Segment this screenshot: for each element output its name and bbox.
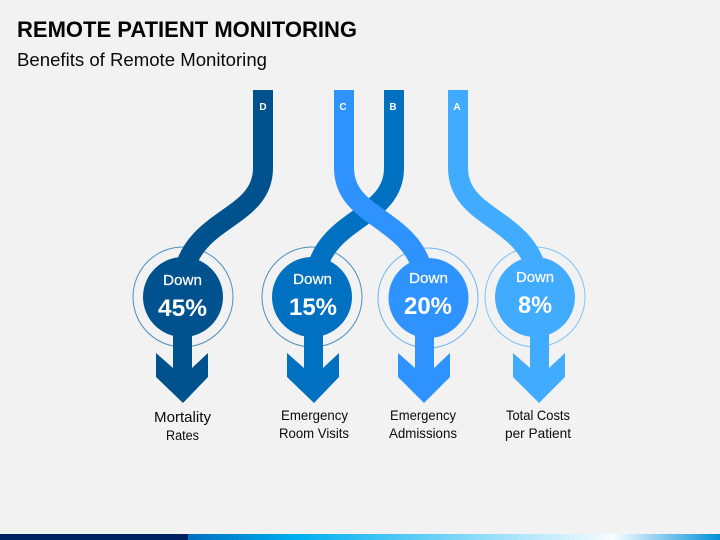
label A: per Patient <box>505 425 571 441</box>
circle B <box>272 257 352 337</box>
arrow A <box>513 330 565 403</box>
ribbon D <box>184 90 263 272</box>
value B <box>289 271 337 321</box>
ring A <box>485 247 585 347</box>
circle A <box>495 257 575 337</box>
label C: Emergency <box>390 407 456 423</box>
value C: 20% <box>404 293 452 320</box>
ring C <box>378 248 478 348</box>
value C: Down <box>409 270 448 287</box>
value A <box>516 269 554 319</box>
ribbon A <box>458 90 537 272</box>
label A: Total Costs <box>506 407 570 423</box>
ring B <box>262 247 362 347</box>
circle C <box>388 258 468 338</box>
letter D: D <box>259 102 267 113</box>
letter B: B <box>389 102 397 113</box>
label D: Mortality <box>154 410 212 426</box>
value B: Down <box>293 271 332 288</box>
label B: Emergency <box>281 407 348 423</box>
ribbon B <box>316 90 394 272</box>
value D: 45% <box>158 295 207 322</box>
column D: mortality rates <box>133 90 267 443</box>
label D <box>154 410 212 443</box>
subtitle: Benefits of Remote Monitoring <box>17 49 267 70</box>
arrow C <box>398 330 450 403</box>
circle D <box>143 257 223 337</box>
label C: Admissions <box>389 425 457 441</box>
ring D <box>133 247 233 347</box>
label B <box>279 407 349 441</box>
label D: Rates <box>166 428 199 443</box>
value A: 8% <box>518 292 552 319</box>
value A: Down <box>516 269 554 286</box>
column B: emergency room visits <box>262 90 397 441</box>
letter C: C <box>339 102 347 113</box>
label B: Room Visits <box>279 425 349 441</box>
arrow B <box>287 330 339 403</box>
column C: emergency admissions <box>339 90 478 441</box>
value D: Down <box>163 272 202 289</box>
value D <box>158 272 207 322</box>
label A <box>505 407 571 441</box>
value B: 15% <box>289 294 337 321</box>
ribbon C <box>344 90 423 272</box>
value C <box>404 270 452 320</box>
title: REMOTE PATIENT MONITORING <box>17 17 357 42</box>
letter A: A <box>453 102 461 113</box>
label C <box>389 407 457 441</box>
arrow D <box>156 330 208 403</box>
footer bar <box>0 534 720 540</box>
column A: total costs per patient <box>453 90 585 441</box>
